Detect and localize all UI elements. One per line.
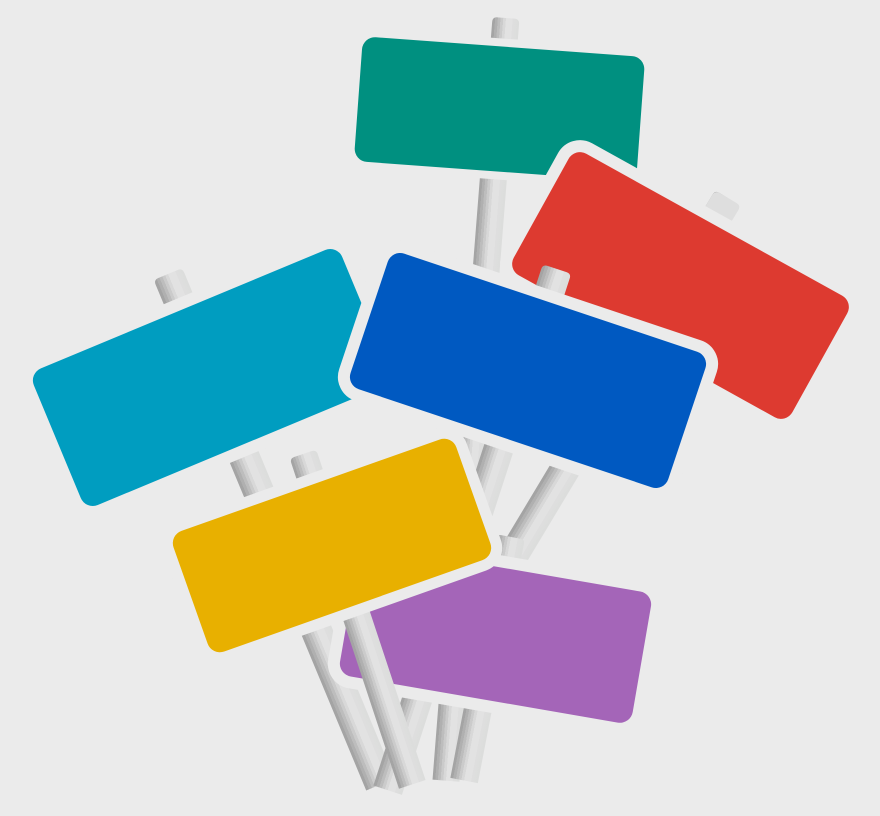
pole: cyan sign bbox=[154, 268, 395, 790]
sign: blue bbox=[346, 250, 710, 491]
sign: cyan bbox=[29, 245, 394, 510]
pole: yellow sign bbox=[290, 450, 426, 789]
sign: green bbox=[354, 36, 645, 182]
sign: purple bbox=[338, 543, 653, 725]
pole: green sign bbox=[433, 17, 519, 782]
pole: purple sign bbox=[450, 534, 525, 783]
pole: red sign bbox=[458, 190, 741, 634]
pole: blue sign bbox=[373, 264, 571, 795]
sign: red bbox=[507, 147, 854, 424]
sign: yellow bbox=[169, 435, 495, 656]
